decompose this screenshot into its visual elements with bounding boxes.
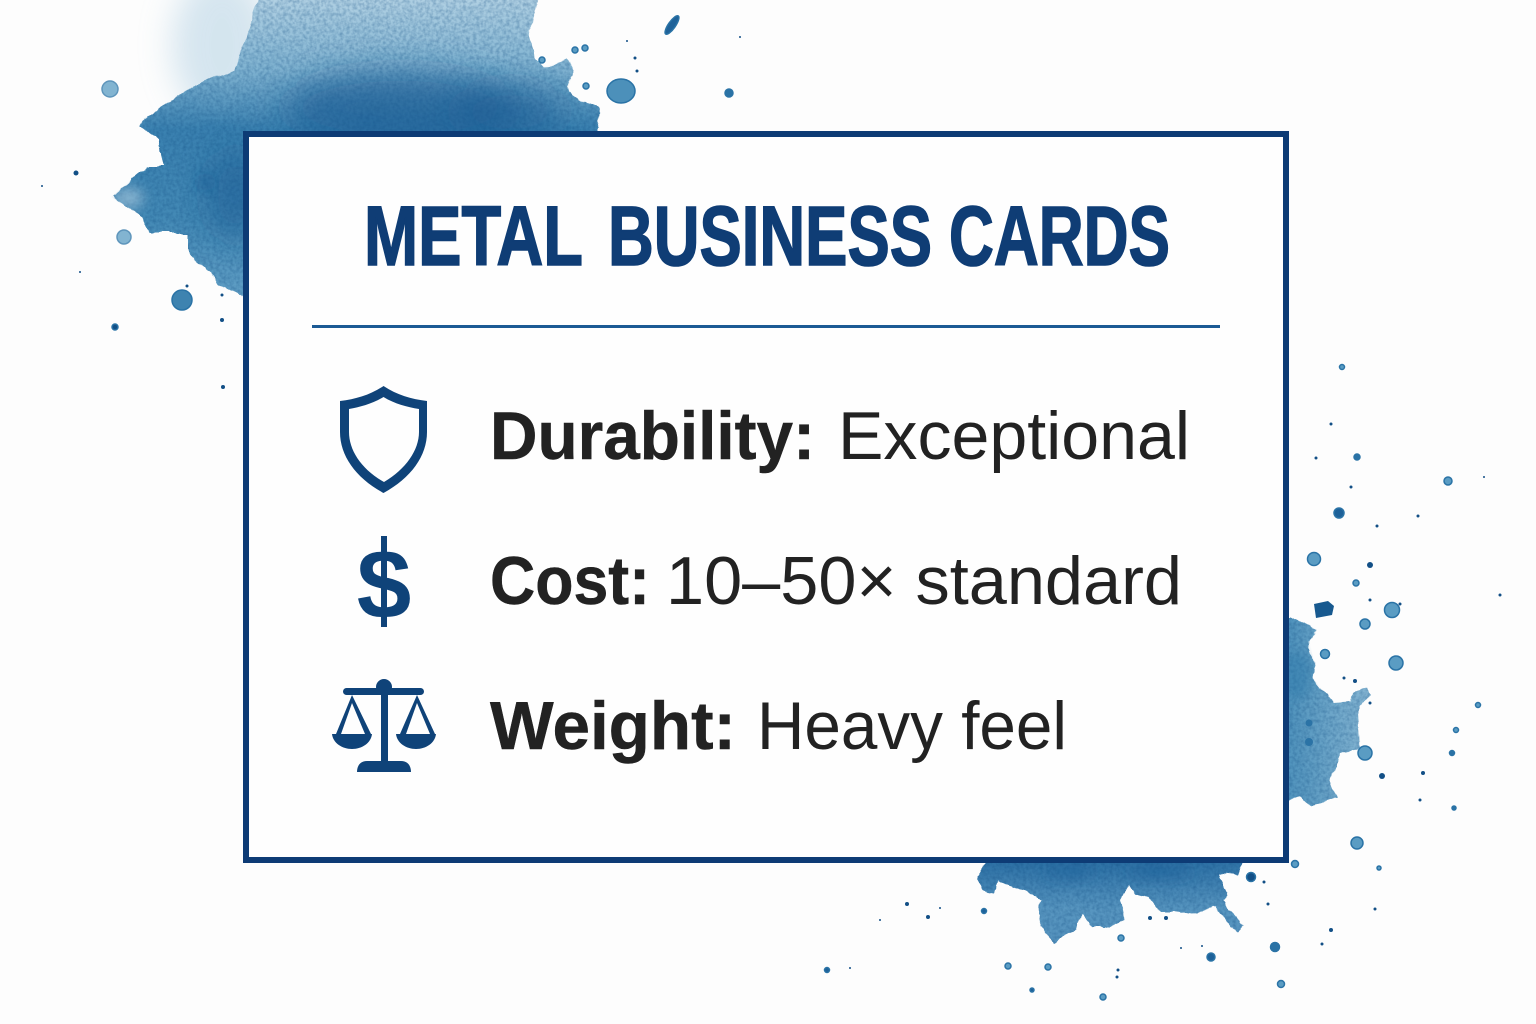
- icon: shield: [340, 386, 427, 493]
- row: weight: [490, 688, 1067, 764]
- watercolor splash: top left: [111, 0, 600, 300]
- row: durability: [490, 398, 1190, 474]
- tiny specks: bottom: [849, 880, 1376, 978]
- paint splatter dots: top left: [102, 14, 733, 330]
- paint splatter dots: bottom: [824, 872, 1284, 1000]
- title: BUSINESS: [608, 189, 932, 283]
- tiny specks: right: [1314, 422, 1502, 802]
- tiny specks: top left: [41, 36, 741, 389]
- title: CARDS: [949, 189, 1170, 283]
- title: METAL: [364, 189, 583, 283]
- row: durability: Durability:: [490, 398, 815, 474]
- row: durability: Exceptional: [838, 398, 1190, 474]
- icon: balance scale: [332, 679, 436, 772]
- watercolor splash: right: [1280, 617, 1370, 805]
- title: [364, 189, 1170, 283]
- icon: dollar sign: $: [357, 529, 411, 639]
- card panel: [246, 134, 1286, 860]
- row: cost: Cost:: [490, 543, 650, 619]
- row: weight: Weight:: [490, 688, 736, 764]
- divider: [312, 325, 1220, 328]
- row: cost: 10–50× standard: [666, 543, 1182, 619]
- paint splatter dots: right: [1292, 364, 1480, 870]
- row: weight: Heavy feel: [757, 688, 1067, 764]
- watercolor splash: bottom: [977, 860, 1243, 942]
